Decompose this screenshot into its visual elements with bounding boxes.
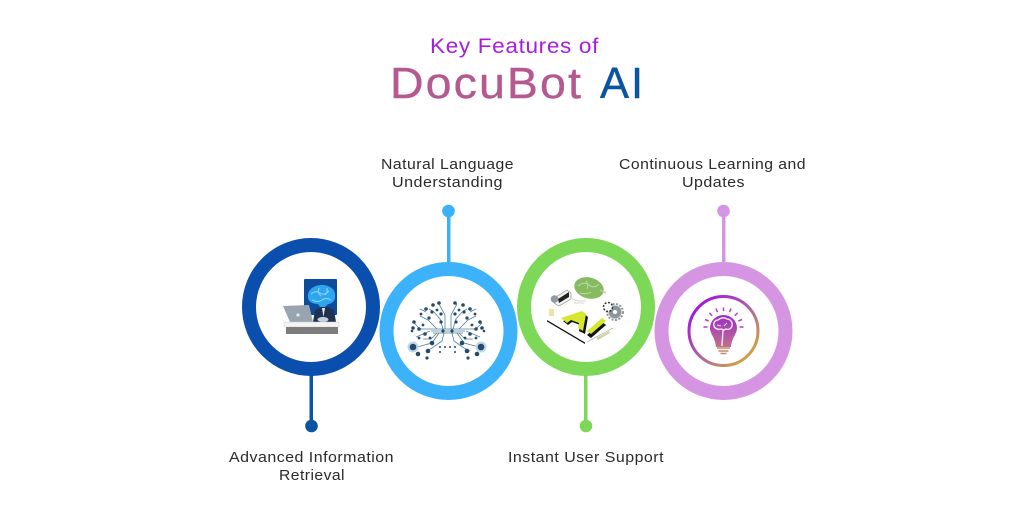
ring: lilac (662, 269, 786, 393)
ring: light blue (386, 269, 510, 393)
feature: instant user support (508, 245, 664, 466)
title (390, 35, 645, 108)
icon: neural circuit brain (408, 301, 486, 360)
label: Continuous Learning and (619, 156, 806, 173)
label: Retrieval (279, 467, 345, 484)
feature: advanced information retrieval (229, 245, 394, 484)
title line: key features: Key Features of (430, 35, 599, 58)
label: Understanding (392, 174, 503, 191)
title word: DocuBot: DocuBot (390, 59, 583, 108)
label (619, 156, 806, 191)
icon: lightbulb brain badge (689, 296, 758, 366)
label (229, 449, 394, 484)
feature: continuous learning and updates (619, 156, 806, 393)
connector: lilac (717, 205, 730, 265)
icon: isometric AI board (547, 274, 623, 344)
ring: green (524, 245, 648, 369)
ring: blue (249, 245, 373, 369)
connector: light blue (442, 205, 455, 265)
icon: person with brain at laptop (283, 279, 339, 334)
connector: green (580, 372, 592, 432)
label: Natural Language (381, 156, 514, 173)
label: Advanced Information (229, 449, 394, 466)
label (381, 156, 514, 191)
title word: AI: AI (600, 59, 645, 108)
connector: blue (305, 372, 318, 432)
label: Instant User Support (508, 449, 664, 466)
feature: natural language understanding (381, 156, 514, 393)
label: Updates (682, 174, 745, 191)
